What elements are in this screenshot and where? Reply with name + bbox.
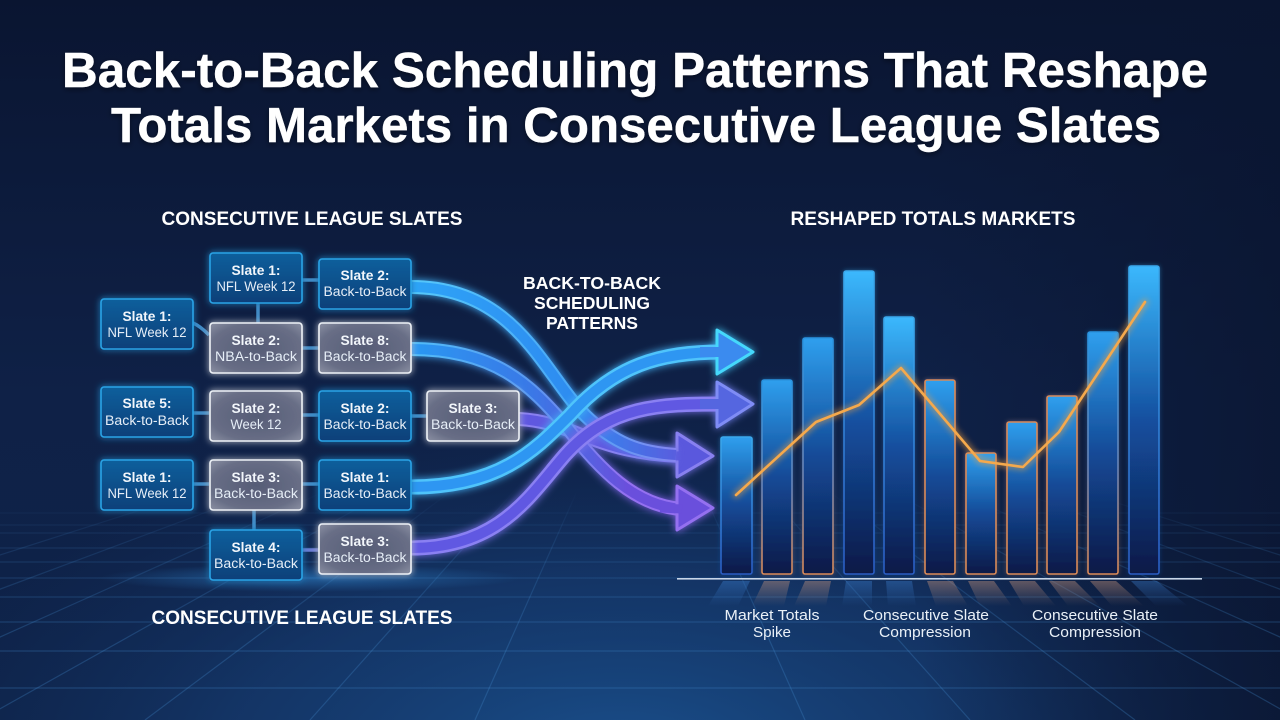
slate box: Slate 3 Back-to-Back bottom: Slate 3: bbox=[340, 534, 390, 549]
slate box: Slate 8 Back-to-Back bbox=[319, 323, 411, 373]
axis label: consecutive slate compression right bbox=[1032, 607, 1158, 641]
slate box: Slate 3 Back-to-Back bottom bbox=[319, 524, 411, 574]
slate box: Slate 1 Back-to-Back bbox=[319, 460, 411, 510]
axis label: consecutive slate compression middle: Compression bbox=[879, 624, 971, 641]
slate box: Slate 4 Back-to-Back: Slate 4: bbox=[231, 540, 281, 555]
axis label: consecutive slate compression right: Compression bbox=[1049, 624, 1141, 641]
slate box: Slate 8 Back-to-Back: Back-to-Back bbox=[324, 349, 407, 364]
slate box: Slate 1 NFL Week 12 lower: NFL Week 12 bbox=[108, 486, 186, 501]
slate box: Slate 2 Back-to-Back middle bbox=[319, 391, 411, 441]
axis label: consecutive slate compression right: Consecutive Slate bbox=[1032, 607, 1158, 624]
slate box: Slate 3 Back-to-Back far right: Back-to-Back bbox=[431, 417, 515, 432]
arrow: Slate 2 to lower right bbox=[411, 287, 676, 455]
slate box: Slate 1 NFL Week 12 lower bbox=[101, 460, 193, 510]
arrow: purple Slate 3 into lower flow bbox=[519, 419, 713, 477]
slate box: Slate 2 Week 12: Week 12 bbox=[230, 417, 282, 432]
slate box: Slate 1 NFL Week 12 top: NFL Week 12 bbox=[216, 279, 296, 294]
slate box: Slate 1 NFL Week 12 top bbox=[210, 253, 302, 303]
slate box: Slate 3 Back-to-Back lower: Slate 3: bbox=[231, 470, 281, 485]
slate box: Slate 2 Back-to-Back middle: Back-to-Back bbox=[324, 417, 407, 432]
slate box: Slate 5 Back-to-Back bbox=[101, 387, 193, 437]
slate box: Slate 1 Back-to-Back: Back-to-Back bbox=[324, 486, 407, 501]
heading: consecutive league slates top: CONSECUTIVE LEAGUE SLATES bbox=[162, 208, 462, 230]
slate box: Slate 2 Week 12: Slate 2: bbox=[231, 401, 281, 416]
slate box: Slate 3 Back-to-Back far right: Slate 3: bbox=[448, 401, 498, 416]
slate box: Slate 1 NFL Week 12 top: Slate 1: bbox=[231, 263, 281, 278]
slate box: Slate 2 NBA-to-Back bbox=[210, 323, 302, 373]
slate box: Slate 5 Back-to-Back: Slate 5: bbox=[122, 396, 172, 411]
connectors between slates bbox=[193, 280, 427, 550]
slate box: Slate 4 Back-to-Back bbox=[210, 530, 302, 580]
slate box: Slate 2 Back-to-Back top bbox=[319, 259, 411, 309]
slate box: Slate 2 Back-to-Back middle: Slate 2: bbox=[340, 401, 390, 416]
slate box: Slate 1 NFL Week 12 left bbox=[101, 299, 193, 349]
slate box: Slate 8 Back-to-Back: Slate 8: bbox=[340, 333, 390, 348]
arrow: Slate 8 to bottom right bbox=[411, 349, 713, 530]
axis label: consecutive slate compression middle: Consecutive Slate bbox=[863, 607, 989, 624]
title: Totals Markets in Consecutive League Slates bbox=[111, 99, 1161, 153]
bar reflections bbox=[708, 581, 1188, 606]
slate box: Slate 1 NFL Week 12 lower: Slate 1: bbox=[122, 470, 172, 485]
slate box: Slate 1 NFL Week 12 left: NFL Week 12 bbox=[108, 325, 186, 340]
bars bbox=[721, 266, 1159, 574]
slate box: Slate 2 Back-to-Back top: Slate 2: bbox=[340, 268, 390, 283]
slate box: Slate 2 Week 12 bbox=[210, 391, 302, 441]
label: back-to-back scheduling patterns: BACK-TO-BACK bbox=[523, 273, 661, 293]
arrow: Slate 3 purple up bbox=[411, 382, 753, 548]
slate box: Slate 1 NFL Week 12 left: Slate 1: bbox=[122, 309, 172, 324]
trend line bbox=[736, 302, 1145, 495]
flow arrows bbox=[411, 287, 753, 548]
slate box: Slate 1 Back-to-Back: Slate 1: bbox=[340, 470, 390, 485]
slate box: Slate 4 Back-to-Back: Back-to-Back bbox=[214, 556, 298, 571]
slate box: Slate 2 NBA-to-Back: Slate 2: bbox=[231, 333, 281, 348]
slate box: Slate 5 Back-to-Back: Back-to-Back bbox=[105, 413, 189, 428]
axis label: market totals spike: Spike bbox=[753, 624, 791, 641]
heading: consecutive league slates bottom: CONSECUTIVE LEAGUE SLATES bbox=[152, 607, 452, 629]
bar chart: reshaped totals bbox=[677, 266, 1202, 606]
slate box: Slate 2 Back-to-Back top: Back-to-Back bbox=[324, 284, 407, 299]
axis label: consecutive slate compression middle bbox=[863, 607, 989, 641]
arrow: Slate 1 blue up bbox=[411, 330, 753, 487]
title: Back-to-Back Scheduling Patterns That Reshape bbox=[62, 44, 1208, 98]
title bbox=[62, 44, 1208, 153]
label: back-to-back scheduling patterns: SCHEDULING bbox=[534, 293, 650, 313]
slate box: Slate 3 Back-to-Back far right bbox=[427, 391, 519, 441]
slate box: Slate 2 NBA-to-Back: NBA-to-Back bbox=[215, 349, 297, 364]
axis label: market totals spike bbox=[724, 607, 820, 641]
slate box: Slate 3 Back-to-Back lower bbox=[210, 460, 302, 510]
slate box: Slate 3 Back-to-Back bottom: Back-to-Back bbox=[324, 550, 407, 565]
label: back-to-back scheduling patterns bbox=[523, 273, 661, 333]
slate box: Slate 3 Back-to-Back lower: Back-to-Back bbox=[214, 486, 298, 501]
heading: reshaped totals markets: RESHAPED TOTALS MARKETS bbox=[790, 208, 1076, 230]
baseline bbox=[677, 578, 1202, 580]
label: back-to-back scheduling patterns: PATTERNS bbox=[546, 313, 638, 333]
axis label: market totals spike: Market Totals bbox=[724, 607, 820, 624]
